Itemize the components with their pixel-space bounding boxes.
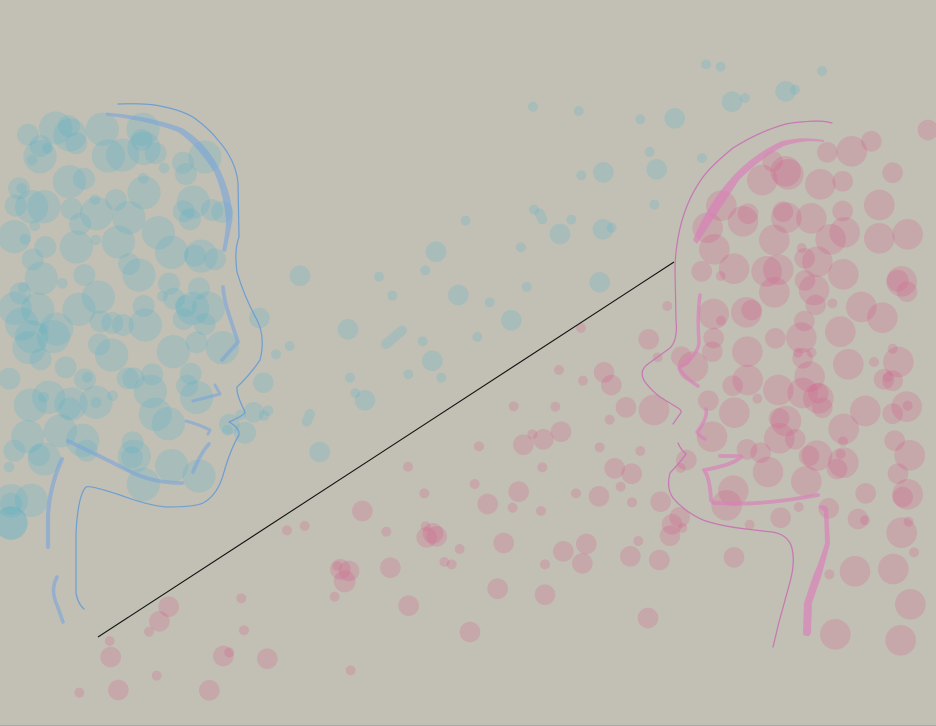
- stroke: chin: [193, 444, 209, 472]
- bottom edge: [0, 725, 936, 726]
- stroke: jaw: [68, 441, 182, 483]
- pink dots: bottom left: [74, 593, 356, 701]
- stroke: nose: [697, 409, 706, 439]
- right profile: brush strokes: [679, 138, 830, 636]
- stroke: crown of head: [693, 138, 824, 244]
- pink dots: upper right head: [638, 120, 936, 382]
- stroke: shoulder: [54, 577, 63, 622]
- teal dots: lower left head: [0, 356, 274, 540]
- stroke: mouth: [186, 421, 210, 434]
- teal dots: drifting middle: [307, 241, 610, 462]
- stroke: neck: [803, 505, 830, 636]
- stroke: mouth and jaw: [704, 456, 818, 504]
- left profile: brush strokes: [48, 112, 238, 622]
- pink dots: drifting lower centre: [282, 479, 626, 642]
- teal dots: top right: [697, 59, 827, 163]
- pink dots: lower right head: [616, 361, 926, 656]
- diagonal line between the faces: [98, 262, 674, 637]
- teal dots: drifting top centre: [461, 102, 685, 244]
- stroke: nose: [193, 385, 220, 401]
- left profile: outline: [76, 104, 262, 609]
- stroke: back of neck: [48, 459, 62, 547]
- stroke: cheek: [222, 287, 238, 360]
- pink dots: drifting middle: [403, 323, 625, 479]
- stroke: cheek: [679, 295, 700, 386]
- teal dots: upper left head: [0, 111, 310, 372]
- stroke: crown of head: [106, 112, 233, 252]
- right profile: outline: [642, 121, 832, 647]
